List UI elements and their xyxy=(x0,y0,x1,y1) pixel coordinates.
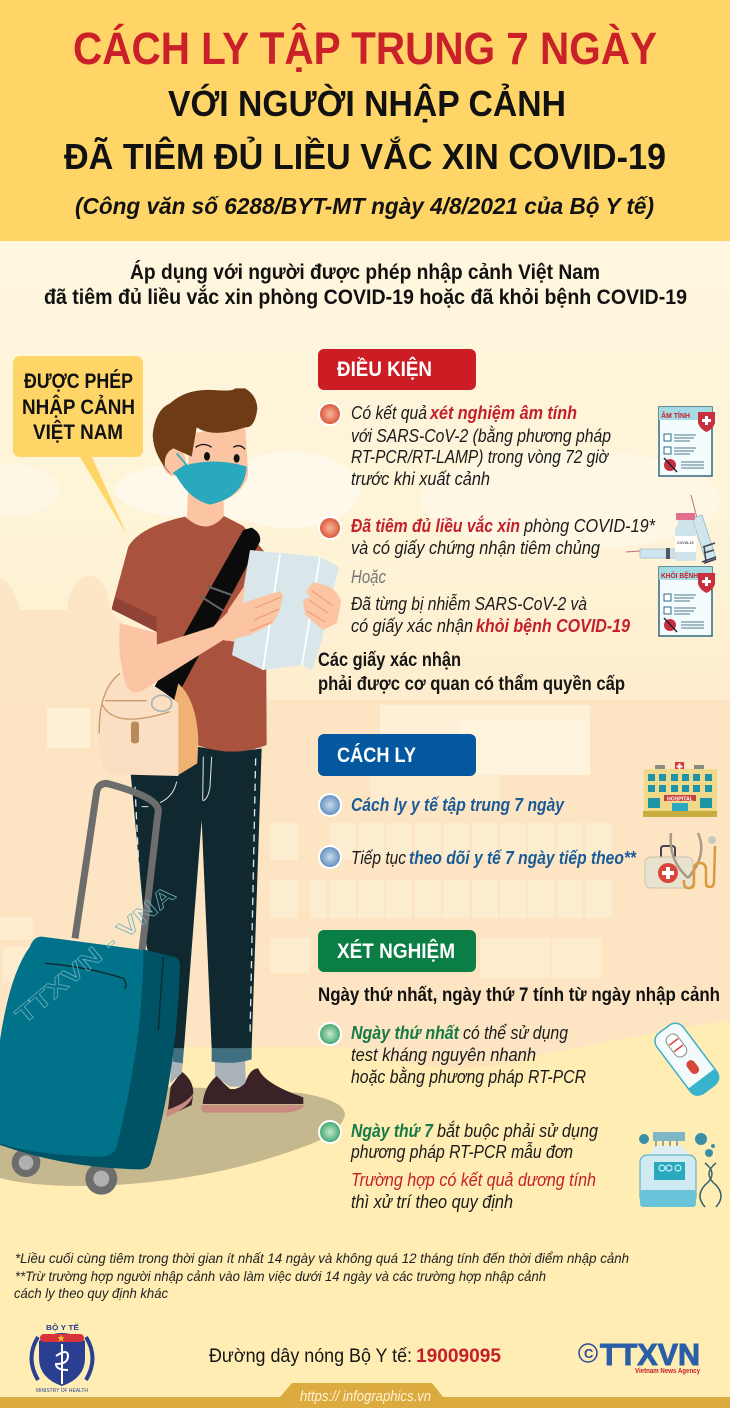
logo: ministry of health: ★ xyxy=(57,1334,65,1343)
item: vaccinated: phòng COVID-19* xyxy=(523,516,656,536)
hotline: Đường dây nóng Bộ Y tế: xyxy=(209,1346,412,1367)
item: negative test: RT-PCR/RT-LAMP) trong vòng 72 giờ xyxy=(351,447,610,467)
icon: PCR machine xyxy=(639,1132,721,1207)
heading pill: ĐIỀU KIỆN xyxy=(337,357,432,381)
speech bubble: ĐƯỢC PHÉP xyxy=(24,370,133,393)
item: seventh day: thì xử trí theo quy định xyxy=(351,1192,513,1212)
icon: vaccine and syringes xyxy=(626,495,716,563)
section: xét nghiệm xyxy=(318,930,722,1212)
title line 3: ĐÃ TIÊM ĐỦ LIỀU VẮC XIN COVID-19 xyxy=(64,135,666,177)
hotline: 19009095 xyxy=(416,1346,501,1367)
item: first day: Ngày thứ nhất xyxy=(351,1023,460,1043)
footer bar: https:// infographics.vn xyxy=(300,1388,431,1405)
footnotes xyxy=(14,1250,629,1301)
speech bubble: VIỆT NAM xyxy=(33,420,123,444)
heading pill xyxy=(318,930,476,972)
item: recovered: Đã từng bị nhiễm SARS-CoV-2 và xyxy=(351,594,587,614)
document reference: (Công văn số 6288/BYT-MT ngày 4/8/2021 của Bộ Y tế) xyxy=(75,193,654,219)
note: competent authority: Các giấy xác nhận xyxy=(318,650,461,671)
item: recovered xyxy=(351,594,630,636)
item: negative test xyxy=(318,402,611,489)
icon: recovery certificate: KHỎI BỆNH xyxy=(661,571,698,580)
item: first day: test kháng nguyên nhanh xyxy=(351,1045,536,1065)
icon: hospital: HOSPITAL xyxy=(667,796,693,802)
eyes xyxy=(196,444,245,449)
left hand xyxy=(225,585,283,641)
heading pill: CÁCH LY xyxy=(337,744,416,767)
section: điều kiện xyxy=(318,349,716,695)
note: competent authority: phải được cơ quan có thẩm quyền cấp xyxy=(318,674,625,695)
footnotes: *Liều cuối cùng tiêm trong thời gian ít nhất 14 ngày và không quá 12 tháng tính đến thời điểm nhập cảnh xyxy=(15,1250,629,1266)
note: competent authority xyxy=(318,650,625,695)
footnotes: cách ly theo quy định khác xyxy=(14,1285,168,1301)
top banner xyxy=(0,0,730,241)
item: seventh day xyxy=(318,1120,598,1212)
footnotes: **Trừ trường hợp người nhập cảnh vào làm việc dưới 14 ngày và các trường hợp nhập cảnh xyxy=(15,1268,546,1284)
item: negative test: xét nghiệm âm tính xyxy=(429,403,577,423)
bag xyxy=(160,683,198,775)
logo: ministry of health: BỘ Y TẾ xyxy=(46,1322,79,1332)
icon: rapid test cassette xyxy=(651,1019,722,1099)
face xyxy=(187,425,248,503)
item: vaccinated xyxy=(318,515,656,558)
intro text: Áp dụng với người được phép nhập cảnh Việt Nam xyxy=(130,261,600,284)
item: vaccinated: và có giấy chứng nhận tiêm chủng xyxy=(351,538,600,558)
speech bubble xyxy=(13,356,143,535)
icon: medical kit and stethoscope xyxy=(645,833,716,888)
item: negative test: Có kết quả xyxy=(351,403,427,423)
suitcase xyxy=(0,783,181,1195)
item: health monitoring xyxy=(318,845,637,869)
icon: negative certificate: ÂM TÍNH xyxy=(661,411,690,420)
section: cách ly xyxy=(318,734,717,888)
item: first day: có thể sử dụng xyxy=(463,1023,568,1043)
logo: TTXVN: C xyxy=(584,1346,594,1361)
icon: recovery certificate xyxy=(659,567,715,636)
item: seventh day: Ngày thứ 7 xyxy=(351,1121,434,1141)
item: vaccinated: Đã tiêm đủ liều vắc xin xyxy=(351,515,520,536)
body and arm xyxy=(97,388,267,776)
item: first day xyxy=(318,1022,586,1087)
logo: ministry of health: MINISTRY OF HEALTH xyxy=(36,1388,88,1394)
item: first day: hoặc bằng phương pháp RT-PCR xyxy=(351,1067,586,1087)
title line 2: VỚI NGƯỜI NHẬP CẢNH xyxy=(168,82,566,124)
heading pill xyxy=(318,734,476,776)
title line 1: CÁCH LY TẬP TRUNG 7 NGÀY xyxy=(73,23,657,74)
item: 7 day quarantine: Cách ly y tế tập trung 7 ngày xyxy=(351,795,565,815)
legs and shoes xyxy=(131,747,304,1117)
icon: vaccine and syringes: COVID-19 xyxy=(677,541,694,545)
icon: negative certificate xyxy=(659,407,715,476)
logo: TTXVN: TTXVN xyxy=(600,1337,700,1372)
shoulder strap xyxy=(153,528,260,703)
heading pill: XÉT NGHIỆM xyxy=(337,939,455,963)
logo: TTXVN: Vietnam News Agency xyxy=(635,1368,700,1375)
item: 7 day quarantine xyxy=(318,793,565,817)
heading pill xyxy=(318,349,476,390)
right hand xyxy=(303,582,341,630)
item: negative test: trước khi xuất cảnh xyxy=(351,469,490,489)
intro text xyxy=(44,261,687,309)
item: health monitoring: Tiếp tục xyxy=(351,848,406,868)
speech bubble: NHẬP CẢNH xyxy=(22,395,135,419)
item: recovered: có giấy xác nhận xyxy=(351,616,473,636)
icon: hospital xyxy=(643,762,717,817)
arm xyxy=(119,587,260,693)
logo: ministry of health xyxy=(32,1322,92,1394)
item: recovered: khỏi bệnh COVID-19 xyxy=(476,616,630,636)
intro text: đã tiêm đủ liều vắc xin phòng COVID-19 hoặc đã khỏi bệnh COVID-19 xyxy=(44,285,687,309)
paper and hands xyxy=(225,550,341,670)
item: seventh day: bắt buộc phải sử dụng xyxy=(437,1121,598,1141)
footer bar xyxy=(0,1383,730,1408)
watermark: TTXVN - VNA xyxy=(11,880,181,1030)
item: seventh day: phương pháp RT-PCR mẫu đơn xyxy=(350,1142,573,1162)
or label: Hoặc xyxy=(351,567,386,587)
item: seventh day: Trường hợp có kết quả dương tính xyxy=(351,1170,596,1190)
hair xyxy=(153,388,257,477)
item: negative test: với SARS-CoV-2 (bằng phương pháp xyxy=(351,426,611,446)
illustration: traveller with suitcase xyxy=(0,388,341,1195)
face mask xyxy=(173,462,247,505)
item: health monitoring: theo dõi y tế 7 ngày tiếp theo** xyxy=(409,848,637,868)
